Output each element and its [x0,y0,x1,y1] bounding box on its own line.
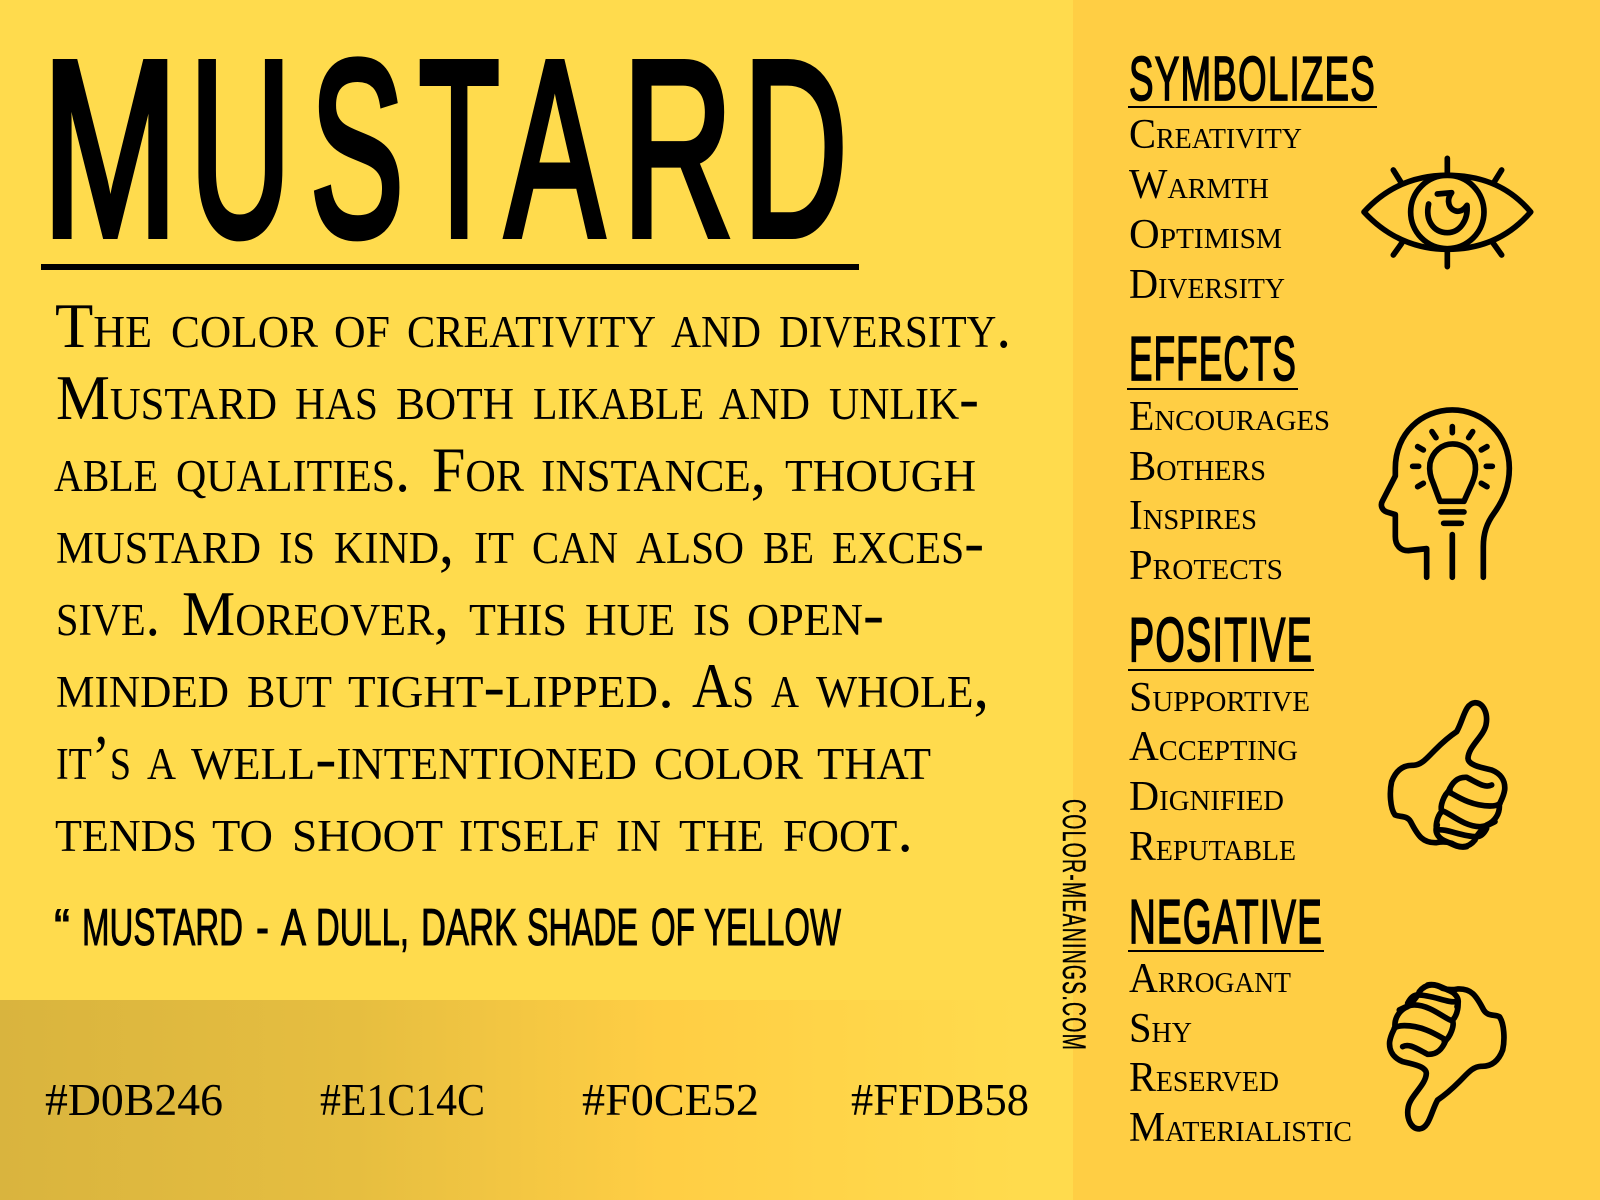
colour swatch gradient band [0,1000,1073,1200]
section: effects [1127,325,1330,589]
description text block: sive. [56,578,160,649]
description text block: also [636,506,744,577]
title underline [41,264,859,270]
description text block: For [432,434,524,505]
title: U [190,9,291,288]
description text block: exces- [832,506,984,577]
description text block: but [247,650,332,721]
description text block: this [469,578,567,649]
description text block: and [671,290,761,361]
description text block: be [763,506,814,577]
description text block: qualities. [176,434,410,505]
list: negative: Reserved [1129,1055,1279,1101]
list: positive: Dignified [1129,774,1284,820]
hex code 2: #E1C14C [320,1075,485,1125]
description text block: mustard [56,506,261,577]
description text block: likable [533,362,704,433]
icon: eye [1364,158,1531,267]
description text block: it [474,506,514,577]
list: symbolizes: Optimism [1129,212,1282,258]
list: effects [1129,394,1330,589]
definition quote: - [256,899,269,957]
description text block: can [532,506,618,577]
list: positive: Reputable [1129,824,1296,870]
title: T [419,9,500,288]
description text block: hue [585,578,675,649]
description text block: unlik- [829,362,979,433]
description text block: color [654,722,803,793]
description text block: shoot [292,794,443,865]
description text block: has [295,362,378,433]
hex code 4: #FFDB58 [851,1075,1029,1125]
description text block: color [171,290,318,361]
description text block: a [147,722,176,793]
list: negative: Arrogant [1129,956,1291,1002]
title: M [42,9,178,288]
list: symbolizes: Warmth [1129,162,1269,208]
description text block: As [692,650,754,721]
list: effects: Encourages [1129,394,1330,440]
hex code 1: #D0B246 [45,1075,223,1125]
description text block: diversity. [779,290,1011,361]
description text block: itself [459,794,599,865]
icon: thumbs down [1390,985,1504,1129]
description text block: in [616,794,661,865]
description text block: both [396,362,514,433]
heading: negative: NEGATIVE [1129,888,1323,957]
description text block: tight-lipped. [348,650,674,721]
list: negative [1129,956,1352,1151]
description text block: The [55,290,152,361]
description text block: kind, [334,506,454,577]
description text block: it’s [56,722,131,793]
list: symbolizes: Diversity [1129,262,1285,308]
description text block: well-intentioned [191,722,637,793]
description text block: foot. [783,794,913,865]
list: negative: Shy [1129,1006,1192,1052]
list: effects: Protects [1129,543,1283,589]
list: negative: Materialistic [1129,1105,1352,1151]
main background panel [0,0,1073,1200]
description text block: to [212,794,273,865]
title: A [506,9,604,288]
icon: thumbs up [1390,703,1505,847]
description text block: tends [55,794,197,865]
section: negative [1128,888,1352,1151]
list: positive: Supportive [1129,675,1310,721]
hex code 3: #F0CE52 [582,1075,759,1125]
description text block: minded [56,650,229,721]
section: positive [1128,606,1314,870]
description text block [54,290,1011,865]
icon: head with light bulb [1381,410,1509,577]
definition quote: SHADE [527,899,638,957]
list: effects: Inspires [1129,493,1257,539]
description text block: Mustard [56,362,277,433]
title: D [743,9,847,288]
description text block: though [785,434,976,505]
title: R [622,9,733,288]
definition quote: YELLOW [704,899,841,957]
definition quote: DARK [421,899,517,957]
description text block: whole, [816,650,989,721]
description text block: open- [747,578,884,649]
description text block: is [279,506,315,577]
list: positive: Accepting [1129,724,1298,770]
description text block: able [54,434,158,505]
list: symbolizes [1129,112,1302,308]
list: effects: Bothers [1129,444,1266,490]
description text block: instance, [541,434,766,505]
definition quote: “ [54,899,70,957]
title: S [310,9,404,288]
list: symbolizes: Creativity [1129,112,1302,158]
list: positive [1129,675,1310,870]
heading: effects: EFFECTS [1129,325,1297,394]
definition quote: OF [651,899,695,957]
description text block: creativity [407,290,656,361]
definition quote: DULL, [316,899,409,957]
section: symbolizes [1128,45,1377,308]
definition quote: MUSTARD [82,899,243,957]
description text block: of [334,290,390,361]
description text block: is [693,578,731,649]
description text block: Moreover, [182,578,449,649]
description text block: a [771,650,799,721]
description text block: that [817,722,931,793]
heading: symbolizes: SYMBOLIZES [1129,45,1376,114]
description text block: and [719,362,810,433]
side panel background [1073,0,1600,1200]
heading: positive: POSITIVE [1129,606,1313,675]
definition quote: A [281,899,306,957]
description text block: the [679,794,764,865]
